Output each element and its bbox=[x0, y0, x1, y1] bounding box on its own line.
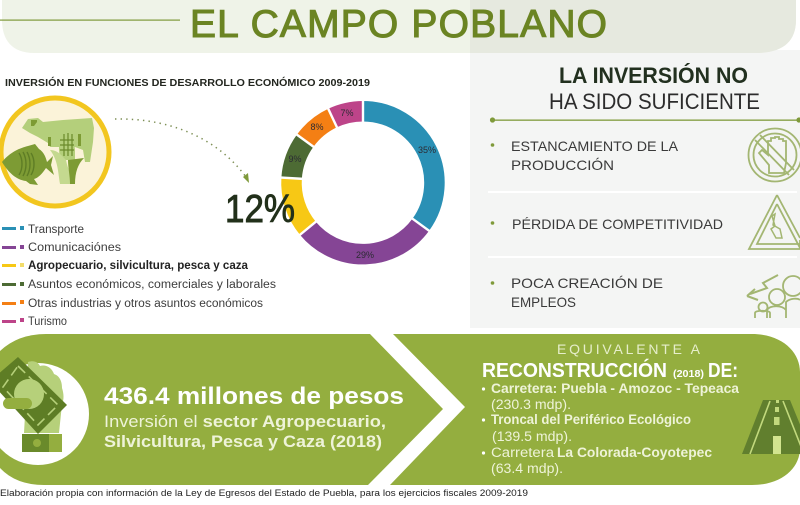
legend: Turismo: Turismo bbox=[28, 316, 67, 328]
legend: Turismo bbox=[2, 316, 67, 328]
divider bbox=[490, 117, 800, 123]
item: La Colorada bbox=[482, 445, 712, 476]
segment: Transporte 35% bbox=[363, 111, 434, 225]
donut labels: 9% bbox=[288, 154, 302, 164]
item: La Colorada: Carretera bbox=[491, 445, 555, 460]
donut labels: 29% bbox=[356, 250, 374, 260]
segment: Agropecuario 12% bbox=[291, 178, 308, 228]
segment: Turismo 7% bbox=[333, 111, 363, 118]
donut chart bbox=[291, 111, 434, 254]
item: poca creación: POCA CREACIÓN DE bbox=[511, 275, 663, 291]
donut labels bbox=[288, 108, 436, 260]
item: poca creación bbox=[491, 275, 663, 310]
big percentage: 12% bbox=[225, 188, 295, 231]
icon: no hand bbox=[748, 128, 800, 182]
chart heading: INVERSIÓN EN FUNCIONES DE DESARROLLO ECONÓMICO 2009-2019 bbox=[5, 76, 370, 89]
legend: Comunicaciones: Comunicaciónes bbox=[28, 242, 121, 254]
item: Troncal bbox=[482, 412, 691, 444]
segment: Comunicaciones 29% bbox=[308, 225, 421, 254]
icon: warning triangle bbox=[749, 195, 800, 249]
panel heading: la inversión no ha sido suficiente: HA SIDO SUFICIENTE bbox=[549, 89, 760, 114]
banner heading: reconstrucción: RECONSTRUCCIÓN bbox=[482, 358, 667, 382]
banner text: amount bbox=[104, 383, 404, 451]
banner heading: reconstrucción: (2018) bbox=[673, 369, 704, 380]
banner text: amount: Inversión el sector Agropecuario, bbox=[104, 412, 386, 431]
item: La Colorada: (63.4 mdp). bbox=[491, 461, 563, 476]
icon: cow bbox=[22, 118, 94, 162]
icon: road bbox=[742, 400, 800, 454]
item: Puebla-Amozoc-Tepeaca bbox=[482, 381, 740, 412]
banner: chevron shape bbox=[390, 334, 800, 485]
item: estancamiento: PRODUCCIÓN bbox=[511, 157, 614, 173]
panel heading: la inversión no ha sido suficiente bbox=[549, 63, 760, 114]
item: Puebla-Amozoc-Tepeaca: Carretera: Puebla - Amozoc - Tepeaca bbox=[491, 381, 740, 396]
item: pérdida: PÉRDIDA DE COMPETITIVIDAD bbox=[512, 216, 723, 232]
title: EL CAMPO POBLANO bbox=[190, 3, 607, 46]
right panel background bbox=[470, 50, 800, 328]
dotted arrow bbox=[115, 119, 249, 183]
legend: Agropecuario: Agropecuario, silvicultura, pesca y caza bbox=[28, 260, 249, 272]
item: estancamiento: ESTANCAMIENTO DE LA bbox=[511, 138, 679, 154]
item: Troncal: (139.5 mdp). bbox=[492, 429, 572, 444]
legend: Asuntos: Asuntos económicos, comerciales y laborales bbox=[28, 279, 276, 291]
header band bbox=[0, 0, 796, 53]
list: problems bbox=[491, 138, 723, 310]
list: road projects bbox=[482, 381, 740, 476]
icon: farm circle with cow, fish and corn bbox=[1, 98, 109, 206]
donut labels: 35% bbox=[418, 145, 436, 155]
donut labels: 7% bbox=[340, 108, 354, 118]
segment: Otras 8% bbox=[305, 118, 333, 141]
legend: Transporte: Transporte bbox=[28, 224, 84, 236]
item: poca creación: EMPLEOS bbox=[511, 294, 576, 310]
icon: money in hand bbox=[0, 357, 89, 465]
banner heading: reconstrucción: DE: bbox=[708, 360, 738, 382]
segment: Asuntos 9% bbox=[292, 141, 305, 178]
icon: fish bbox=[2, 144, 54, 185]
item: Puebla-Amozoc-Tepeaca: (230.3 mdp). bbox=[491, 397, 571, 412]
legend: Otras: Otras industrias y otros asuntos económicos bbox=[28, 298, 263, 310]
banner text: amount: 436.4 millones de pesos bbox=[104, 383, 404, 410]
legend: Transporte bbox=[2, 224, 84, 236]
item: Troncal: Troncal del Periférico Ecológico bbox=[491, 412, 691, 427]
donut labels: 8% bbox=[310, 122, 324, 132]
banner text: amount: Silvicultura, Pesca y Caza (2018) bbox=[104, 432, 382, 451]
panel heading: la inversión no ha sido suficiente: LA INVERSIÓN NO bbox=[559, 63, 748, 88]
banner: pentagon bbox=[0, 334, 443, 485]
source note: Elaboración propia con información de la Ley de Egresos del Estado de Puebla, para los ejercicios fiscales 2009-2019 bbox=[0, 488, 528, 498]
item: La Colorada: La Colorada-Coyotepec bbox=[557, 445, 712, 460]
icon: corn bbox=[50, 133, 84, 184]
icon: people with falling arrow bbox=[747, 275, 800, 318]
banner heading: reconstrucción bbox=[482, 358, 738, 382]
banner text: equivalente a: EQUIVALENTE A bbox=[557, 341, 701, 357]
legend bbox=[2, 224, 276, 328]
item: estancamiento bbox=[491, 138, 679, 173]
